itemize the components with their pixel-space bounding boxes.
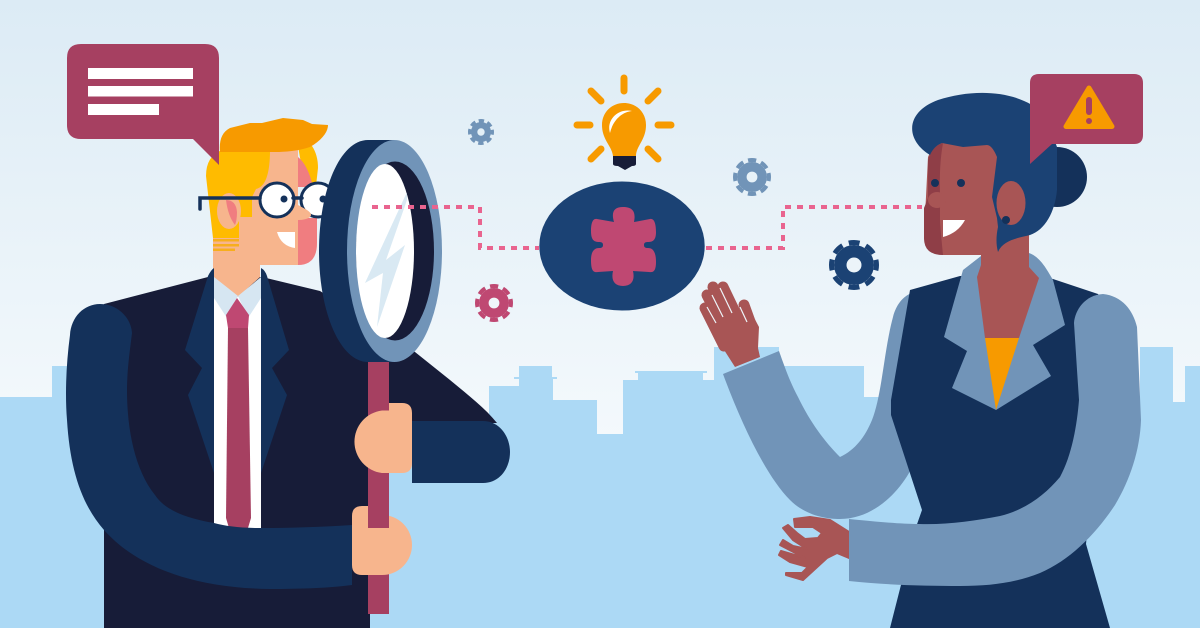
- man smile: [277, 232, 295, 248]
- man shirt: [214, 290, 261, 530]
- man cheek shade: [298, 218, 317, 265]
- dotted connector left: [372, 207, 539, 248]
- woman: [705, 93, 1141, 628]
- woman chest and face: [924, 138, 1039, 338]
- gear: pink: [477, 286, 511, 320]
- man glasses: [200, 183, 335, 217]
- woman hair: [912, 93, 1057, 252]
- puzzle circle: [539, 182, 705, 310]
- man forehead shade: [298, 157, 313, 187]
- speech bubble: warning: [1030, 74, 1143, 164]
- handle between hands: [368, 473, 389, 528]
- man yellow hair back: [298, 146, 318, 186]
- woman shaded face side: [924, 143, 943, 255]
- magnifying glass: [319, 140, 442, 614]
- woman eye: [931, 179, 939, 187]
- woman eye: [957, 179, 965, 187]
- man orange hair: [220, 118, 328, 152]
- city skyline: [0, 347, 1200, 628]
- woman right arm sleeve: [849, 294, 1141, 586]
- man suit: [104, 277, 497, 628]
- man ear: [217, 193, 241, 229]
- woman earring: [1002, 216, 1010, 224]
- magnifier back rim: [319, 140, 394, 362]
- woman bun: [1027, 147, 1087, 207]
- man inner ear: [226, 200, 237, 225]
- gear: dark navy: [832, 242, 876, 288]
- puzzle piece: [591, 207, 656, 286]
- lens glint: [365, 192, 407, 327]
- woman lapels: [944, 253, 1065, 410]
- woman raised hand: [705, 287, 760, 367]
- sky background: [0, 0, 1200, 440]
- gear: mid blue: [735, 160, 769, 194]
- man right sleeve: [412, 421, 510, 483]
- man lapels: [185, 268, 289, 473]
- man sideburn stripes: [213, 239, 239, 251]
- light bulb: [577, 78, 671, 170]
- woman jacket: [890, 276, 1110, 628]
- man collar: [214, 277, 261, 318]
- magnifier inner dark: [356, 162, 434, 340]
- speech bubble: text: [67, 44, 219, 165]
- woman smile: [943, 220, 965, 237]
- woman nose: [928, 192, 946, 208]
- man skin neck and face: [213, 150, 298, 297]
- magnifier lens: [356, 164, 414, 338]
- man left sleeve: [66, 304, 352, 589]
- magnifier front rim: [347, 140, 442, 362]
- dotted connector right: [706, 207, 922, 248]
- man upper hand: [354, 403, 412, 473]
- woman left arm sleeve: [723, 293, 930, 519]
- woman top: [985, 338, 1019, 410]
- man yellow hair: [206, 150, 270, 238]
- woman ear: [996, 181, 1026, 225]
- gear: small blue: [470, 121, 492, 143]
- man: [66, 118, 510, 628]
- man lower hand: [352, 506, 412, 575]
- man nose: [298, 205, 311, 220]
- woman lower hand: [779, 517, 849, 580]
- magnifier handle: [368, 355, 389, 614]
- man tie: [226, 298, 251, 528]
